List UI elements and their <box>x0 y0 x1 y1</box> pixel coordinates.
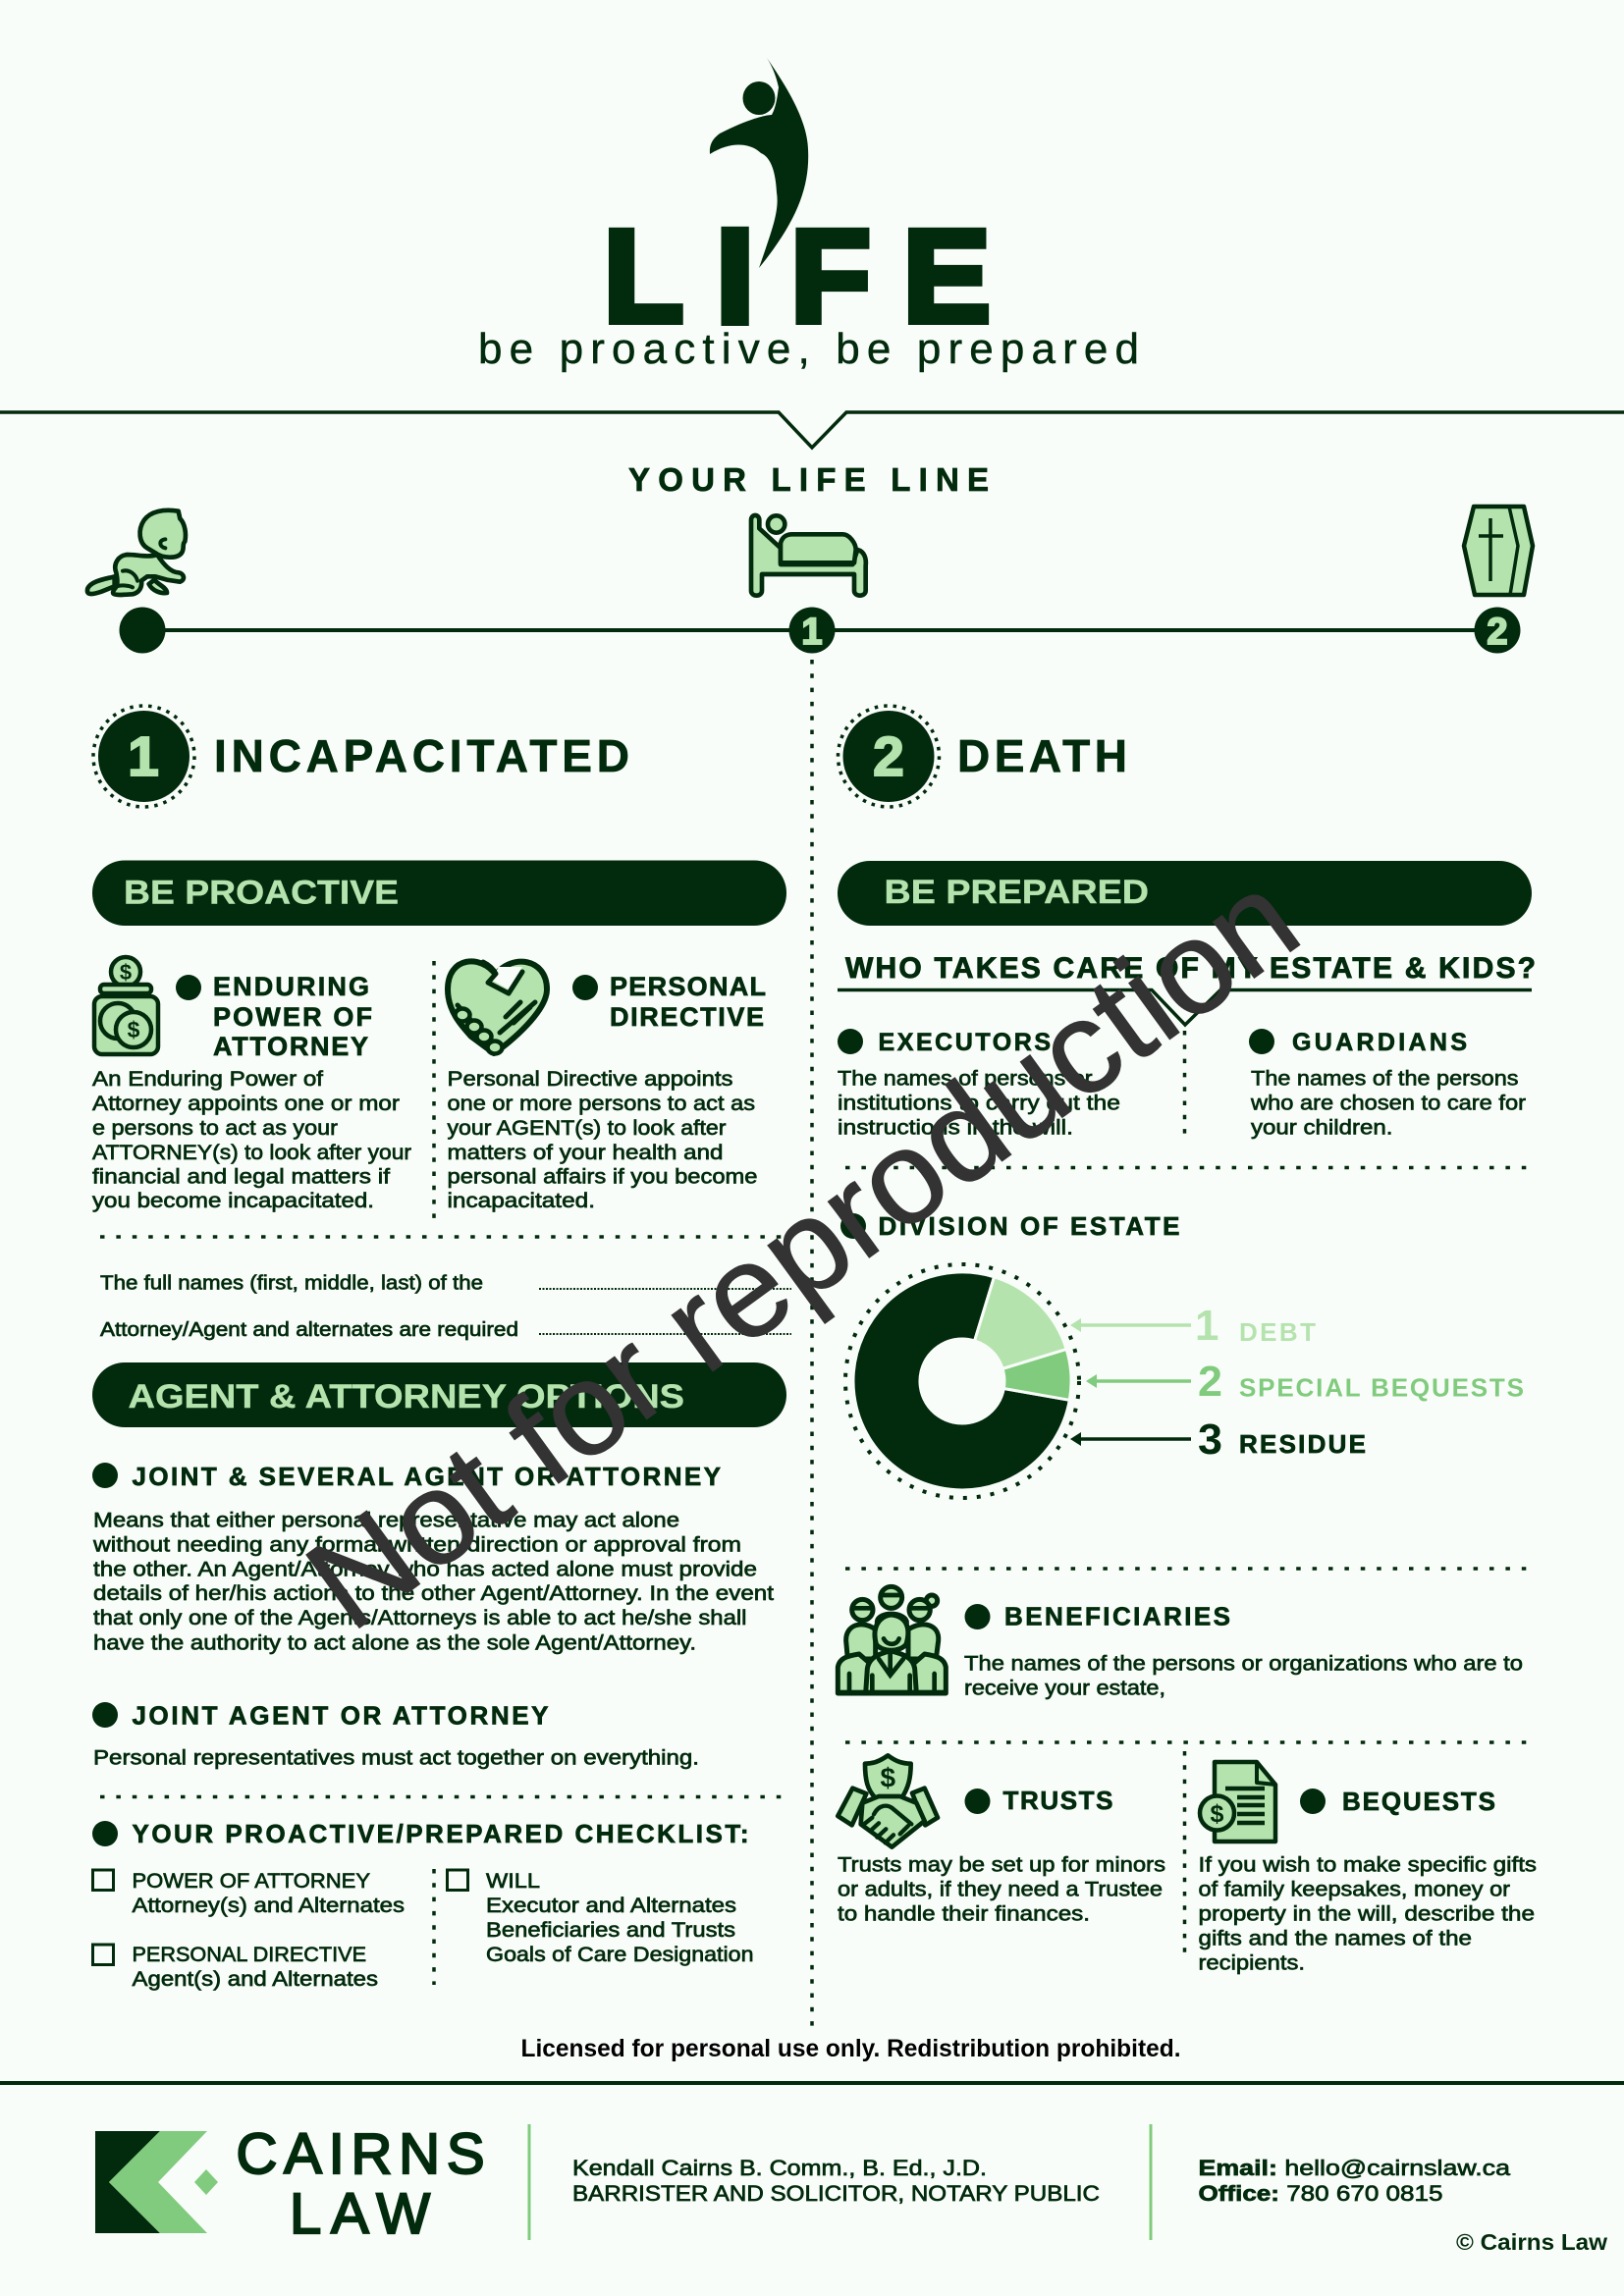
heading: incapacitated: INCAPACITATED <box>214 730 629 781</box>
contact: email and phone <box>1198 2156 1511 2206</box>
checklist: will: Beneficiaries and Trusts <box>486 1918 735 1942</box>
text: executors <box>838 1066 1120 1139</box>
text: beneficiaries: The names of the persons or organizations who are to <box>964 1651 1523 1675</box>
banner: be proactive: BE PROACTIVE <box>124 874 399 911</box>
contact: name and title <box>572 2156 1100 2206</box>
heading: personal directive <box>610 972 766 1032</box>
heading: enduring power of attorney: POWER OF <box>213 1002 372 1032</box>
text: executors: The names of persons or <box>838 1066 1092 1090</box>
icon: leaping figure <box>710 58 808 268</box>
timeline marker 1 <box>789 607 835 654</box>
heading: enduring power of attorney: ENDURING <box>213 972 369 1001</box>
licence notice: Licensed for personal use only. Redistribution prohibited. <box>520 2035 1180 2062</box>
bullet <box>92 1821 118 1846</box>
checklist: will: Executor and Alternates <box>486 1894 736 1917</box>
legend: residue: 3 <box>1198 1415 1222 1464</box>
text: bequests: property in the will, describe the <box>1198 1902 1535 1926</box>
timeline marker 2 <box>1475 607 1520 654</box>
text: bequests: recipients. <box>1198 1951 1305 1975</box>
text: enduring power of attorney: An Enduring Power of <box>92 1067 323 1091</box>
bullet <box>176 975 201 1000</box>
legend: debt <box>1070 1302 1316 1350</box>
timeline <box>87 507 1533 654</box>
bullet <box>838 1029 863 1054</box>
panel: death <box>838 706 1537 1975</box>
checklist: will: Goals of Care Designation <box>486 1943 754 1966</box>
text: guardians: The names of the persons <box>1251 1066 1518 1090</box>
text: executors: institutions to carry out the <box>838 1092 1120 1115</box>
section badge 2 <box>839 706 939 807</box>
title: F <box>790 204 871 349</box>
banner: agent and attorney options: AGENT & ATTORNEY OPTIONS <box>128 1378 684 1415</box>
contact: email and phone: Office: 780 670 0815 <box>1198 2181 1443 2206</box>
checklist: will <box>448 1869 754 1966</box>
bullet <box>1300 1789 1326 1814</box>
header: LIFE logo and tagline <box>478 58 1139 373</box>
checklist: power of attorney <box>92 1869 405 1917</box>
banner: be prepared: BE PREPARED <box>884 874 1149 911</box>
text: bequests: If you wish to make specific gifts <box>1198 1853 1537 1877</box>
text: personal directive: your AGENT(s) to look after <box>448 1116 727 1140</box>
banner: agent and attorney options <box>92 1362 786 1427</box>
heading: bequests: BEQUESTS <box>1342 1787 1495 1816</box>
heading: trusts: TRUSTS <box>1003 1786 1113 1815</box>
text: joint and several: the other. An Agent/Attorney who has acted alone must provide <box>93 1557 757 1580</box>
icon: shield handshake <box>838 1755 938 1847</box>
bullet <box>1249 1029 1274 1054</box>
text: personal directive: incapacitated. <box>448 1189 595 1212</box>
title: E <box>903 204 991 349</box>
logo: wordmark: LAW <box>290 2182 430 2246</box>
contact: name and title: BARRISTER AND SOLICITOR, NOTARY PUBLIC <box>572 2181 1100 2206</box>
icon: document with coin <box>1200 1762 1275 1842</box>
checklist: will: WILL <box>486 1869 540 1893</box>
checklist: power of attorney: POWER OF ATTORNEY <box>132 1869 370 1893</box>
bullet <box>964 1604 990 1629</box>
text: enduring power of attorney: financial and legal matters if <box>92 1164 390 1188</box>
copyright: © Cairns Law <box>1456 2229 1607 2255</box>
legend: special bequests: 2 <box>1198 1358 1222 1406</box>
note: full names required <box>100 1272 791 1341</box>
heading: beneficiaries: BENEFICIARIES <box>1004 1602 1230 1631</box>
icon: heart handshake <box>448 961 547 1054</box>
banner: be prepared <box>838 861 1532 926</box>
text: trusts: Trusts may be set up for minors <box>838 1853 1165 1877</box>
heading: enduring power of attorney <box>213 972 372 1061</box>
text: joint and several: have the authority to act alone as the sole Agent/Attorney. <box>93 1631 696 1655</box>
underline with notch <box>838 989 1532 1025</box>
header divider with notch <box>0 412 1624 448</box>
text: joint and several: details of her/his actions to the other Agent/Attorney. In the event <box>93 1581 774 1605</box>
text: enduring power of attorney: e persons to act as your <box>92 1116 338 1140</box>
legend: residue: RESIDUE <box>1239 1429 1366 1459</box>
text: enduring power of attorney <box>92 1067 411 1212</box>
bullet <box>92 1463 118 1488</box>
text: executors: instructions in the will. <box>838 1115 1073 1139</box>
text: guardians <box>1250 1066 1526 1139</box>
checklist: personal directive: PERSONAL DIRECTIVE <box>132 1943 366 1966</box>
logo: K mark <box>95 2131 218 2233</box>
heading: checklist: YOUR PROACTIVE/PREPARED CHECKLIST: <box>132 1819 748 1848</box>
donut chart: division of estate <box>845 1264 1079 1498</box>
text: beneficiaries: receive your estate, <box>964 1677 1165 1700</box>
text: joint and several: that only one of the Agents/Attorneys is able to act he/she shall <box>93 1606 746 1629</box>
text: enduring power of attorney: you become incapacitated. <box>92 1189 374 1212</box>
logo: wordmark <box>236 2122 485 2246</box>
heading: division of estate: DIVISION OF ESTATE <box>878 1211 1180 1241</box>
text: joint and several: without needing any formal written direction or approval from <box>92 1533 741 1557</box>
heading: who takes care: WHO TAKES CARE OF MY ESTATE & KIDS? <box>845 952 1536 985</box>
text: personal directive: one or more persons to act as <box>448 1092 755 1115</box>
legend: special bequests <box>1086 1358 1524 1406</box>
heading: enduring power of attorney: ATTORNEY <box>213 1032 368 1061</box>
icon: group of people <box>838 1586 946 1695</box>
heading: personal directive: PERSONAL <box>610 972 766 1001</box>
icon: crawling baby <box>87 510 186 595</box>
bullet <box>92 1702 118 1728</box>
text: trusts: or adults, if they need a Trustee <box>838 1877 1163 1900</box>
panel: incapacitated <box>92 706 791 1991</box>
bullet <box>964 1789 990 1814</box>
heading: your life line: YOUR LIFE LINE <box>628 461 989 498</box>
legend: residue <box>1070 1415 1366 1464</box>
legend: debt: DEBT <box>1239 1317 1316 1347</box>
text: joint agent: Personal representatives must act together on everything. <box>93 1745 699 1769</box>
note: full names required: The full names (first, middle, last) of the <box>100 1272 483 1294</box>
logo: wordmark: CAIRNS <box>236 2122 485 2186</box>
text: trusts <box>838 1853 1165 1926</box>
icon: coin jar <box>94 957 158 1054</box>
heading: personal directive: DIRECTIVE <box>610 1002 764 1032</box>
text: enduring power of attorney: Attorney appoints one or mor <box>92 1092 400 1115</box>
text: bequests: gifts and the names of the <box>1198 1926 1472 1949</box>
text: joint and several: Means that either personal representative may act alone <box>93 1508 679 1531</box>
timeline marker 2: 2 <box>1487 612 1508 653</box>
text: trusts: to handle their finances. <box>838 1902 1090 1926</box>
text: personal directive: personal affairs if you become <box>448 1164 758 1188</box>
section badge 1: 1 <box>128 725 159 788</box>
tagline: be proactive, be prepared <box>478 325 1139 373</box>
icon: hospital bed <box>751 515 866 596</box>
footer divider <box>0 2081 1624 2085</box>
icon: shield handshake: $ <box>881 1763 896 1793</box>
heading: executors: EXECUTORS <box>878 1029 1051 1056</box>
heading: joint agent: JOINT AGENT OR ATTORNEY <box>132 1700 548 1730</box>
text: joint and several <box>92 1508 774 1655</box>
banner: be proactive <box>92 860 786 926</box>
timeline start dot <box>120 607 165 654</box>
bullet <box>572 975 598 1000</box>
contact: name and title: Kendall Cairns B. Comm., B. Ed., J.D. <box>572 2156 987 2180</box>
text: personal directive <box>448 1067 758 1212</box>
text: bequests: of family keepsakes, money or <box>1198 1877 1510 1900</box>
icon: coin jar: $ <box>120 960 132 985</box>
section badge 2: 2 <box>873 725 904 788</box>
center vertical dotted divider <box>810 660 814 2034</box>
text: guardians: who are chosen to care for <box>1250 1092 1526 1115</box>
text: personal directive: matters of your health and <box>448 1141 723 1164</box>
legend: special bequests: SPECIAL BEQUESTS <box>1239 1372 1524 1402</box>
icon: coin jar: $ <box>128 1017 140 1042</box>
icon: coffin <box>1464 507 1533 595</box>
bullet <box>840 1213 866 1239</box>
contact: email and phone: Email: hello@cairnslaw.ca <box>1198 2156 1511 2180</box>
section badge 1 <box>93 706 194 807</box>
heading: guardians: GUARDIANS <box>1292 1029 1467 1056</box>
text: guardians: your children. <box>1251 1115 1392 1139</box>
text: bequests <box>1198 1853 1537 1975</box>
heading: joint and several: JOINT & SEVERAL AGENT OR ATTORNEY <box>132 1462 721 1491</box>
timeline marker 1: 1 <box>801 612 823 653</box>
icon: document with coin: $ <box>1211 1800 1224 1828</box>
text: enduring power of attorney: ATTORNEY(s) to look after your <box>92 1141 411 1164</box>
text: beneficiaries <box>964 1651 1523 1700</box>
checklist: power of attorney: Attorney(s) and Alternates <box>132 1894 405 1917</box>
checklist: personal directive: Agent(s) and Alternates <box>132 1967 378 1991</box>
note: full names required: Attorney/Agent and alternates are required <box>100 1319 518 1341</box>
footer: Cairns Law <box>95 2122 1607 2255</box>
heading: death: DEATH <box>957 730 1127 781</box>
title: I <box>717 204 753 349</box>
watermark: Not for reproduction <box>281 844 1324 1657</box>
text: personal directive: Personal Directive appoints <box>448 1067 732 1091</box>
legend: debt: 1 <box>1195 1302 1218 1350</box>
checklist: personal directive <box>92 1943 378 1991</box>
title: L <box>603 204 683 349</box>
title <box>603 204 991 349</box>
